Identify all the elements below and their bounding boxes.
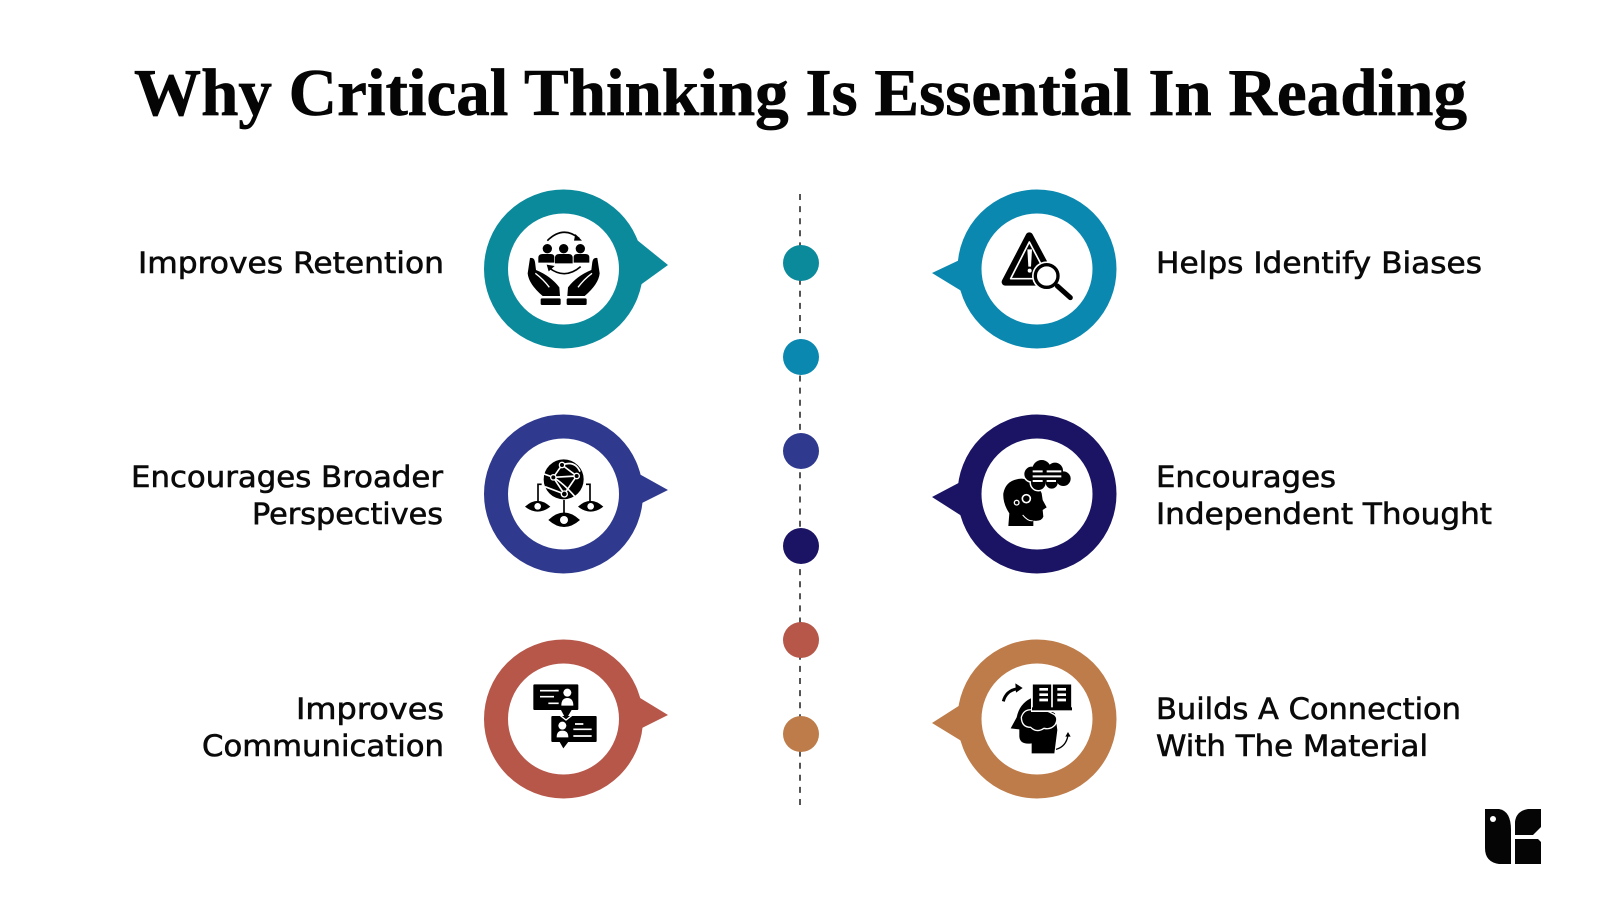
label: helps identify biases: Helps Identify Biases [1156,246,1482,280]
badge: improves communication [496,652,668,786]
label: improves communication: Improves [296,692,444,726]
label: encourages broader perspectives: Perspectives [252,497,443,531]
badge: improves retention [496,202,668,336]
icon: head with thought cloud [1003,460,1071,526]
icon: warning and magnifier [1005,236,1070,298]
label: builds a connection with the material [1156,692,1461,763]
badge: encourages independent thought [932,426,1104,562]
badge: builds a connection with the material [932,652,1104,786]
label: improves communication: Communication [202,729,444,763]
icon: two chat bubbles [533,684,597,748]
icon: hands holding people [528,232,600,305]
title: Why Critical Thinking Is Essential In Reading [134,56,1467,130]
label: encourages independent thought: Encourages [1156,460,1336,494]
label: builds a connection with the material: Builds A Connection [1156,692,1461,726]
badge: helps identify biases [932,202,1104,336]
label: encourages broader perspectives [131,460,443,531]
label: encourages independent thought [1156,460,1492,531]
label: improves communication [202,692,444,763]
label: encourages independent thought: Independent Thought [1156,497,1492,531]
label: builds a connection with the material: With The Material [1156,729,1428,763]
badge: encourages broader perspectives [496,426,668,562]
logo [1485,809,1541,864]
icon: head with brain and book [1003,683,1073,753]
central timeline [783,194,819,805]
label: improves retention: Improves Retention [138,246,444,280]
label: encourages broader perspectives: Encourages Broader [131,460,443,494]
icon: globe with eyes [525,459,603,527]
